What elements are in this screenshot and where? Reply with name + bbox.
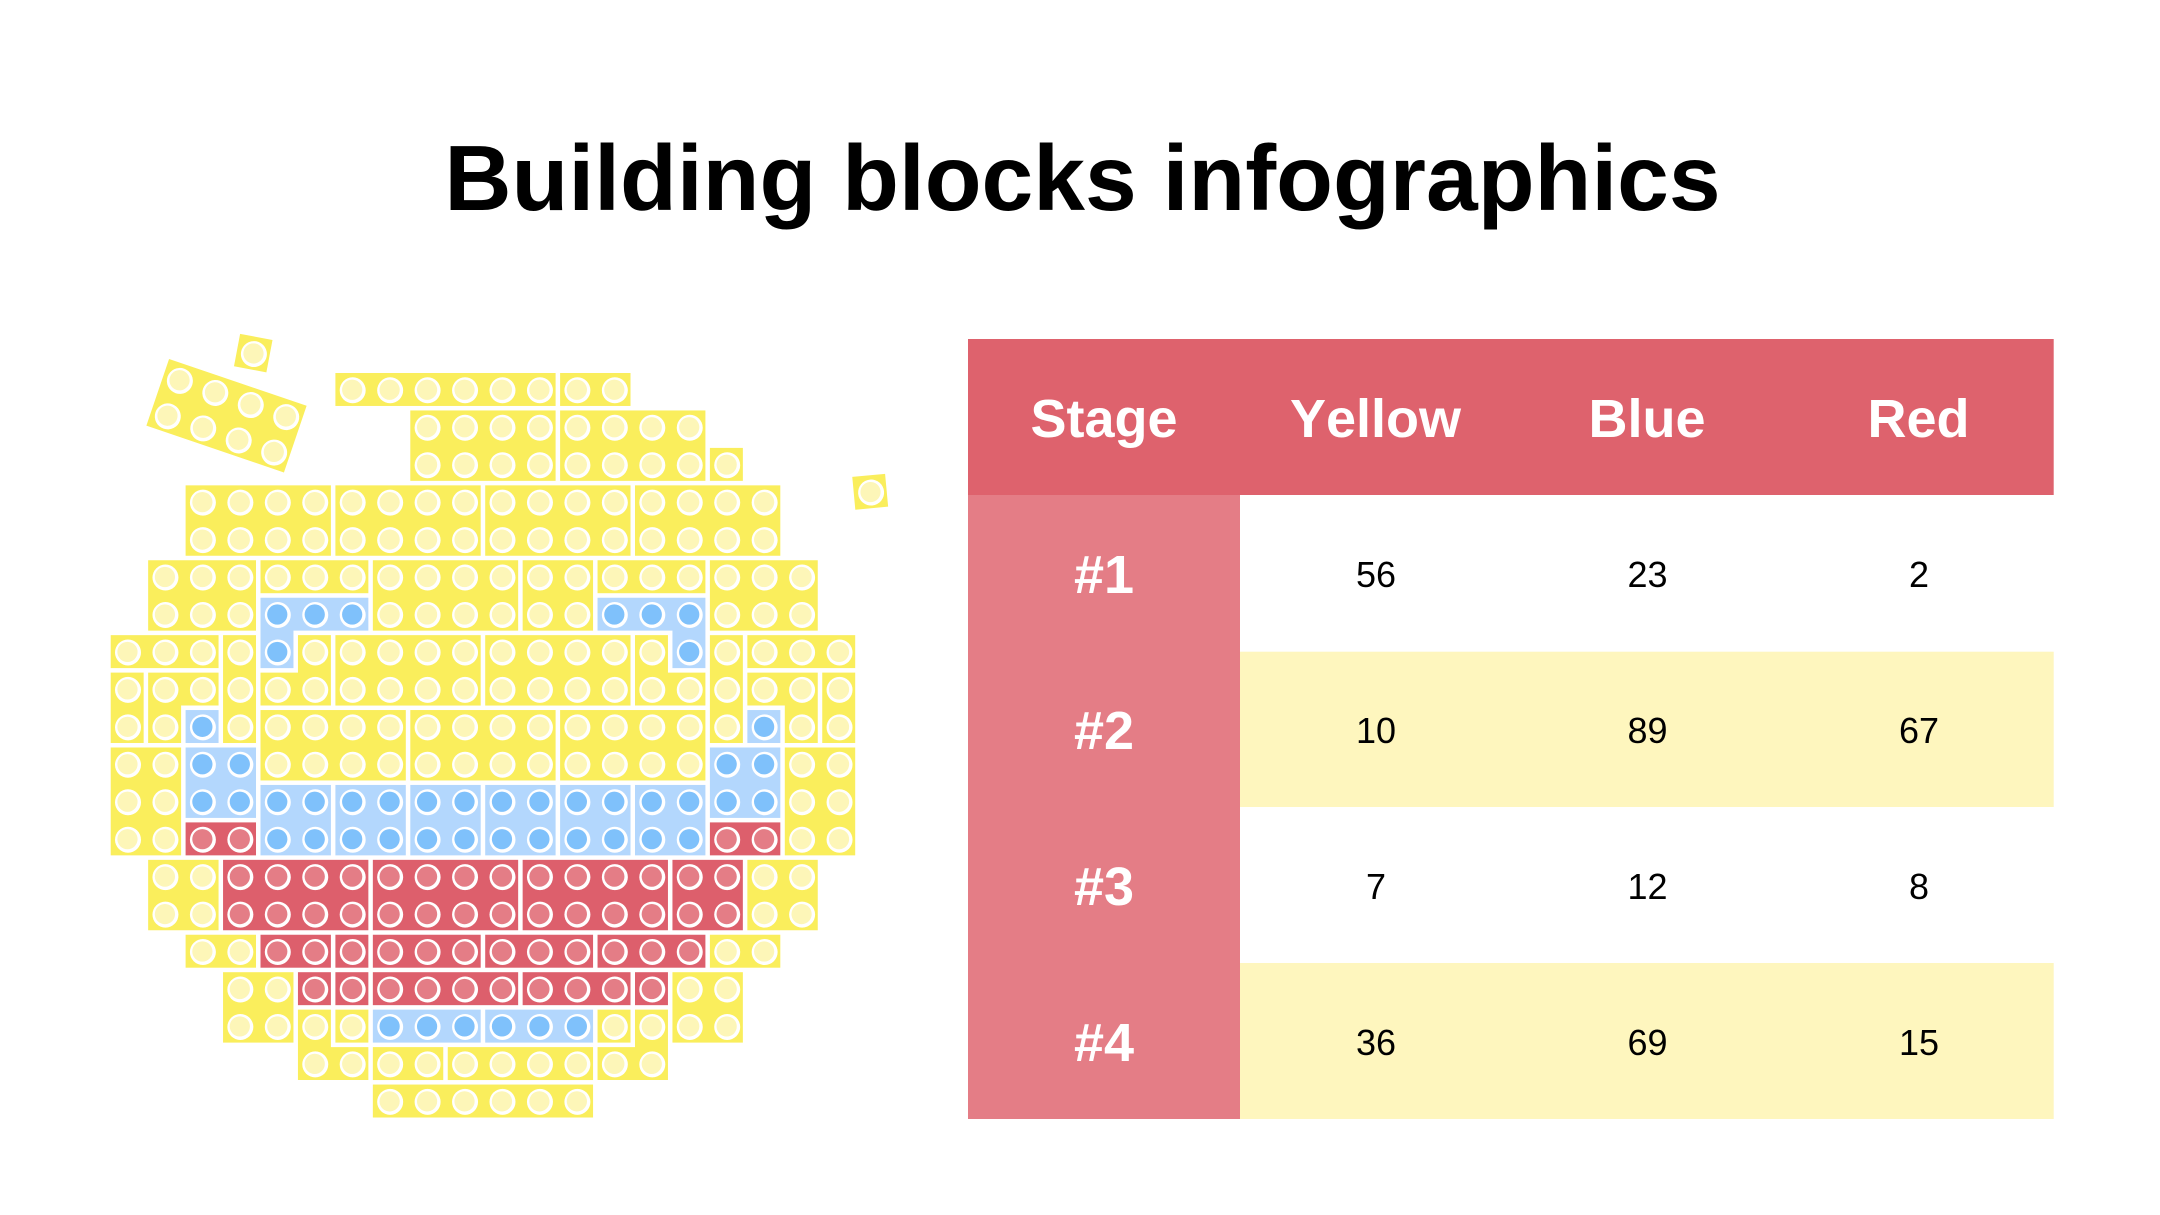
row #3 values: 8 [1909, 866, 1929, 907]
loose brick: tilted yellow 4x2 [146, 359, 307, 472]
yellow bottom rows [148, 860, 818, 1118]
panel: data table [968, 339, 2054, 1119]
blue bricks: upper highlights and liquid band [186, 598, 780, 1043]
red bricks: central band [186, 822, 780, 1005]
stage label #1: #1 [1074, 545, 1134, 605]
row #1 values [1356, 554, 1929, 595]
illustration: apple built from bricks [111, 334, 888, 1118]
row #4 values [1240, 963, 2054, 1119]
yellow top rows [111, 373, 855, 855]
row #1 values: 56 [1356, 554, 1396, 595]
loose brick: small tilted yellow piece on the right [852, 474, 888, 510]
table header row [968, 339, 2054, 495]
header: Red: Red [1867, 389, 1970, 449]
stage label #4: #4 [1074, 1013, 1134, 1073]
row #1 values: 23 [1627, 554, 1668, 595]
header: Blue: Blue [1588, 389, 1706, 449]
header: Yellow: Yellow [1290, 389, 1462, 449]
row #2 values [1240, 652, 2054, 807]
header: Stage: Stage [1030, 389, 1178, 449]
row #2 values: 10 [1356, 710, 1396, 751]
row #1 values: 2 [1909, 554, 1929, 595]
row #3 values: 12 [1627, 866, 1668, 907]
stage column [968, 495, 1240, 1119]
title: Building blocks infographics [444, 126, 1721, 230]
stage label #3: #3 [1074, 857, 1134, 917]
row #4 values: 15 [1899, 1022, 1939, 1063]
stage label #2: #2 [1074, 701, 1134, 761]
brick grid [111, 373, 855, 1118]
row #3 values: 7 [1366, 866, 1386, 907]
row #4 values: 36 [1356, 1022, 1396, 1063]
loose brick: small tilted yellow stem piece [234, 334, 273, 372]
row #2 values: 67 [1899, 710, 1939, 751]
row #4 values: 69 [1627, 1022, 1668, 1063]
row #2 values: 89 [1627, 710, 1668, 751]
row #3 values [1366, 866, 1929, 907]
